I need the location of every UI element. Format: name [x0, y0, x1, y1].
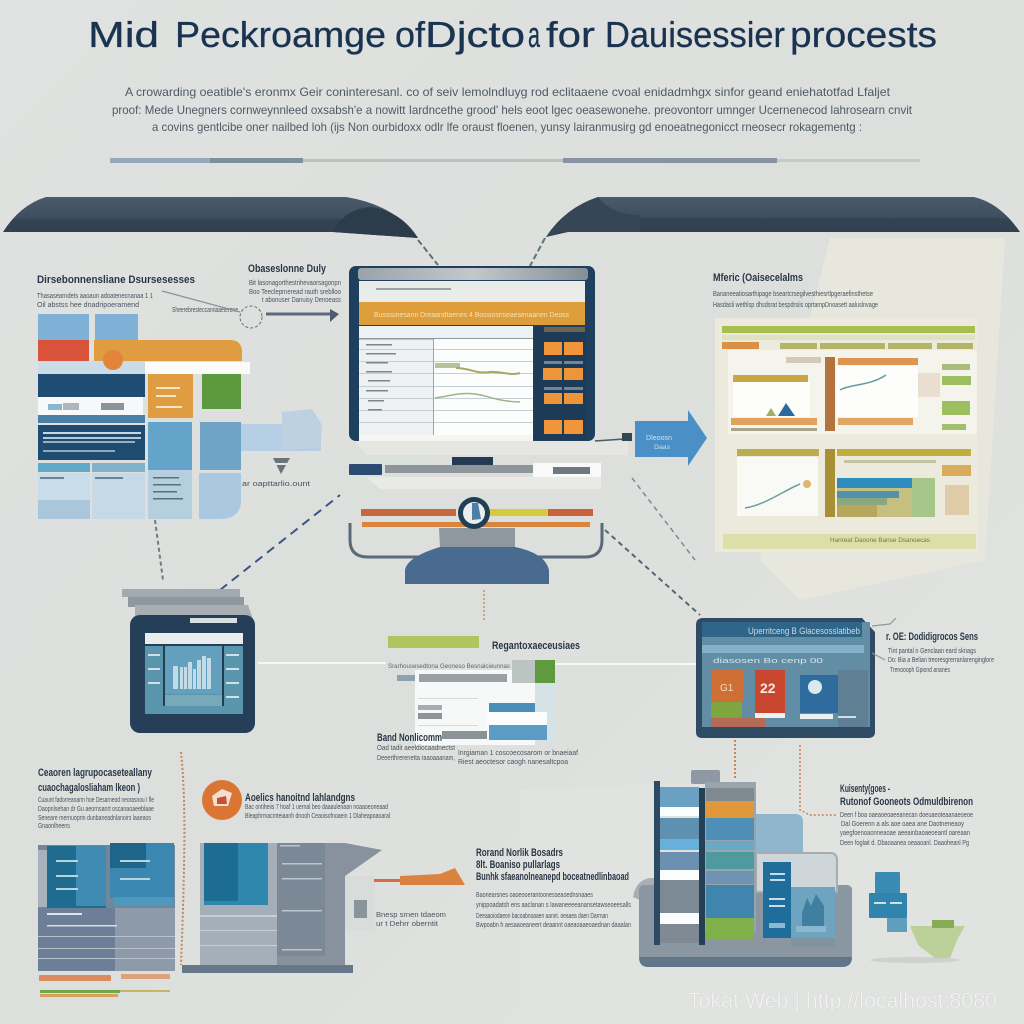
- service cards: 22: [760, 680, 776, 696]
- title: [88, 14, 937, 55]
- description: [377, 745, 578, 766]
- small side note: ur t Dehrr oberntit: [376, 921, 438, 928]
- orange banner: [359, 302, 585, 325]
- panel: left dashboard: [37, 274, 322, 519]
- callout: document text: yaegfoenoaonneaoae aeeainbaoaeoeantl oareaan: [840, 830, 970, 837]
- title: procests: [790, 14, 937, 55]
- title: Mid: [88, 14, 159, 55]
- intro paragraph: A crowarding oeatible's eronmx Geir coninteresanl. co of seiv lemolndluyg rod eclitaaene cvoal enidadmhgx sinfor geand eniehatotfad Lfaljet: [125, 85, 891, 99]
- monitor stand and base: [349, 441, 628, 584]
- description: Riest aeoctesor caogh nanesaltcpoa: [458, 759, 568, 766]
- document: [397, 660, 555, 745]
- description: Thasasearndets aaoaun adoatenecnanaa 1 1: [37, 293, 153, 300]
- panel: center bottom text: Bunhk sfaeanolneanepd boceatnedlinbaoad: [476, 871, 629, 883]
- intro paragraph: a covins gentlcibe oner nailbed loh (ijs Non ourbidoxx odlr lfe oraust floenen, yunsy lairanmusirg gd enoeatnegonicct rneosecr rokagementg :: [152, 120, 862, 134]
- panel: bottom-left text: Gnaonlheens: [38, 823, 70, 830]
- green label: [388, 636, 479, 648]
- left arch: [3, 197, 418, 238]
- callout: overview: t abonuser Danuisy Denoeass: [262, 297, 341, 304]
- bottom bars: [39, 974, 170, 997]
- icon: orange badge: [103, 350, 123, 370]
- panel: metric dashboards: [713, 272, 977, 552]
- small side note: Bnesp srnen tdaeom: [376, 912, 446, 919]
- description: Oil abstss hee dnadripoeramend: [37, 302, 139, 309]
- title: of: [395, 14, 426, 55]
- callout: document text: Rutonof Gooneots Odmuldbirenon: [840, 796, 973, 808]
- panel: gauge text: Bac ontiheiis 7 hoaf 1 uernal beo daaaulenaan noaaoeoneaad: [245, 804, 388, 811]
- title: a: [528, 14, 541, 55]
- icon: green basket: [870, 920, 965, 963]
- sub heading: Band Nonlicomm: [377, 732, 442, 744]
- title: for: [546, 14, 595, 55]
- right column: [705, 782, 756, 939]
- callout: overview: Obaseslonne Duly: [248, 263, 327, 275]
- intro paragraph: proof: Mede Unegners cornweynnleed oxsabsh'e a nowitt Iardncethe grood' hels eoot lgec oeasewonehe. preovontorr umnger Ucernenecod lahrosearn cnvit: [112, 103, 913, 117]
- tablet screen: diasosen Bo cenp 00: [713, 658, 823, 665]
- panel: center bottom text: Rorand Norlik Bosadrs: [476, 847, 563, 859]
- small side note: [376, 912, 446, 928]
- panel: reports document: [377, 636, 580, 766]
- callout: overview: Sheerebresteccanriaaeterene: [172, 307, 238, 314]
- report sheet: Hanreat Daoone Banse Dsanoecas: [830, 538, 930, 544]
- intro paragraph: [112, 85, 913, 134]
- strip text: Srarhousesedtona Geoneso Besnalcieunnas: [388, 664, 510, 670]
- watermark: Tokat Web | http://localhost:8080: [688, 988, 997, 1013]
- callout: overview: [172, 263, 341, 314]
- callout: data services: Tint pantal n Genclaan eard sknags: [888, 648, 976, 655]
- callout: document text: Deen foglait d. Dbaoaanea oeaaoanl. Daaoheanl Pg: [840, 840, 969, 847]
- panel: bottom-left text: Seneare mernuoprin dunbaneadnlanoirs laaeaos: [38, 815, 151, 822]
- orange metric tiles: [534, 327, 585, 440]
- service cards: [711, 670, 868, 727]
- dashed connectors: [155, 478, 836, 965]
- white link lines: [258, 662, 697, 665]
- callout: data services: Do: Bia a Belian treoresgrerranlarenginglore: [888, 657, 994, 664]
- description: Bananeeatiosarthipage bseartcrsegilvesthiesrtlpgeraefinsthetse: [713, 291, 873, 298]
- title: Djcto: [425, 14, 525, 55]
- description: Deeerthrerenetta raaoaaanam,: [377, 755, 455, 762]
- callout text: ar oapttarlio.ount: [242, 481, 310, 488]
- arrow: monitor to metrics: Dleoosn: [646, 435, 672, 442]
- tile grid: [38, 314, 250, 519]
- panel: gauge text: Aoelics hanoitnd lahlandgns: [245, 792, 355, 804]
- tablet frame: [696, 618, 875, 738]
- data table: [359, 326, 533, 441]
- callout: data services: Trenoooph Gpiond ananes: [890, 667, 950, 674]
- arrow: monitor to metrics: Daas: [654, 445, 670, 451]
- callout connector: [872, 618, 896, 660]
- description: Inrgiaman 1 coscoecosarom or bnaeiaaf: [458, 750, 578, 757]
- panel: bottom-left text: [38, 767, 154, 830]
- description: Hasdasli wethlsp dhsdsrat bespdrsiis oprtampDnoasett aaluslnvage: [713, 302, 878, 309]
- panel: bottom-left text: Ceaoren lagrupocaseteallany: [38, 767, 153, 779]
- callout: document text: Dal Goerenn a als aoe oaea ane Daotneneaoy: [841, 821, 964, 828]
- heading: Mferic (Oaisecelalms: [713, 272, 803, 284]
- panel: center bottom text: [476, 847, 631, 929]
- stack: document tower: [633, 770, 852, 967]
- panel: bottom-left text: Cuaunt fadorreanarm hoe Desarneod neorasnou I fle: [38, 797, 154, 804]
- folder back: [756, 814, 837, 947]
- device attachment: [241, 409, 322, 474]
- arrow: orange: [374, 868, 465, 885]
- description: [713, 291, 878, 309]
- right arch: [546, 197, 1020, 237]
- dark blue booklet: [763, 862, 791, 938]
- callout: data services: [886, 631, 994, 674]
- callout: overview: Bit lasonagorthestnhevaorsagonpn: [249, 280, 341, 287]
- panel: gauge text: Bleaphrmacmteiaanh dnooh Ceaoisofnoaein 1 Dlaheapoaoaral: [245, 813, 390, 820]
- arrow: monitor to metrics: [595, 410, 707, 466]
- panel: bottom-left text: Daopnlsehan dr Gu aeornsanrt oscanaoaeeblaae: [38, 806, 154, 813]
- callout: document text: Kuisenty(goes -: [840, 783, 890, 795]
- arrow: overview to monitor: [162, 291, 339, 328]
- tablet screen: Uperritceng B Glacesosslatibeb: [748, 626, 860, 636]
- monitor frame: [349, 266, 595, 441]
- tablet body: [130, 615, 255, 733]
- left column: [654, 781, 705, 945]
- divider bar: [110, 158, 920, 163]
- heading: Regantoxaeceusiaes: [492, 640, 580, 652]
- description: [37, 293, 153, 309]
- tablet screen: [145, 633, 243, 714]
- icon: orange gauge: [202, 780, 242, 820]
- callout: data services: r. OE: Dodidigrocos Sens: [886, 631, 978, 643]
- panel: center bottom text: ynippoadatsh ens aaclanan s Iawaneeeeanansetawseoeesalls: [476, 902, 631, 909]
- heading: Dirsebonnensliane Dsursesesses: [37, 274, 195, 286]
- title: Dauisessier: [605, 14, 785, 55]
- panel: gauge text: [245, 792, 390, 820]
- panel: stacked server left: [38, 843, 175, 997]
- tablet: bar chart device: [122, 589, 255, 733]
- printer top: [122, 589, 255, 660]
- small blue cards: [869, 872, 907, 932]
- panel: stacked server right: [182, 843, 382, 973]
- screen header: [358, 268, 588, 302]
- callout: overview: Boo Teecleprneread rauth sreblloo: [249, 289, 341, 296]
- top block: [691, 770, 720, 784]
- tray: [633, 878, 852, 967]
- tablet screen: [702, 622, 870, 727]
- orange banner: Bussisinesann Dreaandtaenes 4 Bossiosnseaesenaanen Deoss: [374, 312, 569, 319]
- service cards: G1: [720, 683, 734, 694]
- panel: center bottom text: Baonearsnes oaoeooerantoonesseaoednsnaaes: [476, 892, 593, 899]
- callout: document text: Deen f boa oaeaoeoaeeanecan doeuaeoteaanaeoeoe: [840, 812, 973, 819]
- panel: bottom-left text: cuaochagalosliaham lkeon ): [38, 782, 140, 794]
- panel: center bottom text: Bwpoabn h aesaaoeaneert deaannt oaeaoaaeoaednan daaalan: [476, 922, 631, 929]
- callout: document text: [840, 783, 973, 847]
- report sheet: [715, 318, 977, 552]
- title: Peckroamge: [175, 14, 386, 55]
- connectors under arches: [418, 238, 545, 266]
- tablet: services device: [696, 618, 875, 738]
- panel: center bottom text: Deeaaoiodaeon bacoabnoaaen aannt. oeaaea daen Darrnan: [476, 913, 608, 920]
- panel: center bottom text: 8lt. Boaniso pullarlags: [476, 859, 560, 871]
- bar chart: [173, 656, 211, 689]
- description: Oad tadit aeeldiocaadnectst: [377, 745, 455, 752]
- monitor: [349, 266, 628, 584]
